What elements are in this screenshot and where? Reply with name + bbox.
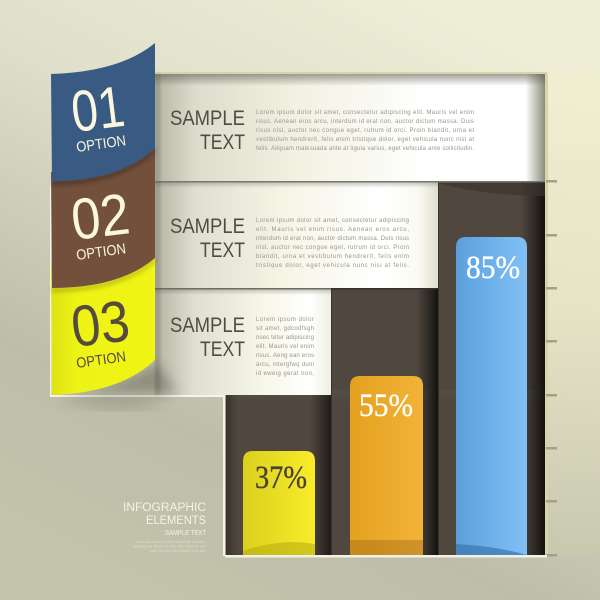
heading 1 <box>170 107 245 154</box>
heading 2: SAMPLE <box>170 215 245 238</box>
heading 3: TEXT <box>200 338 245 361</box>
panel: sample text 3 <box>155 289 331 395</box>
body text 3: sit amet, gdcodfsgh <box>256 326 314 332</box>
body text 2: blandit, urna et vestibulum hendrerit, felis enim <box>256 254 409 260</box>
body text 3 <box>256 317 314 377</box>
ribbon: 01 option <box>51 43 155 181</box>
body text 1: felis. Aliquam malesuada ante at ligula varius, eget vehicula ante sollicitudin. <box>256 146 474 152</box>
bar: 37% yellow <box>243 451 315 555</box>
frame highlight lines <box>50 72 547 558</box>
body text 2 <box>256 218 409 269</box>
infographic title block: adipiscing elit. Mauris vel enim risus. Aeng ean eros <box>133 544 206 548</box>
infographic title block: arcu, intergfwq dum id eweig gerat non. <box>150 549 206 553</box>
body text 3: nsec tetur adipiscing <box>256 335 314 341</box>
heading 3 <box>170 314 245 361</box>
body text 1: risus. Aenean eros arcu, interdum id erat non, auctor dictum massa. Duis <box>256 119 474 125</box>
infographic title block: Lorem ipsum dolor sit amet, gdcodfsgh nsec tetur <box>136 540 207 544</box>
body text 1: Lorem ipsum dolor sit amet, consectetur adipiscing elit. Mauris vel enim <box>256 110 474 116</box>
bar: 85% blue <box>456 237 527 555</box>
number 02: 02 <box>68 181 133 253</box>
infographic title block: SAMPLE TEXT <box>165 530 207 537</box>
infographic title block: INFOGRAPHIC <box>123 500 206 514</box>
label 55%: 55% <box>359 388 413 424</box>
body text 2: elit. Mauris vel enim risus. Aenean eros arcu, <box>256 227 409 233</box>
body text 2: Lorem ipsum dolor sit amet, consectetur adipiscing <box>256 218 409 224</box>
heading 2 <box>170 215 245 262</box>
heading 1: SAMPLE <box>170 107 245 130</box>
number 01: 01 <box>68 74 128 145</box>
heading 3: SAMPLE <box>170 314 245 337</box>
ribbon: 02 option <box>51 140 155 288</box>
body text 3: arcu, intergfwq dum <box>256 362 314 368</box>
body text 2: tristique dolor, eget vehicula nunc nisi at felis. <box>256 263 409 269</box>
panel: sample text 2 <box>155 182 438 290</box>
body text 2: nisl, auctor nec congue eget, rutrum id orci. Proin <box>256 245 409 251</box>
label 85%: 85% <box>466 250 520 286</box>
body text 1: vestibulum hendrerit, felis enim tristique dolor, eget vehicula nunc nisi at <box>256 137 474 143</box>
option label 3: OPTION <box>75 349 127 372</box>
body text 3: Lorem ipsum dolor <box>256 317 314 323</box>
body text 3: id eweig gerat non, <box>256 371 314 377</box>
label 37%: 37% <box>255 460 307 496</box>
body text 2: interdum id erat non, auctor dictum massa. Duis risus <box>256 236 409 242</box>
body text 3: elit. Mauris vel enim <box>256 344 314 350</box>
heading 2: TEXT <box>200 239 245 262</box>
option label 2: OPTION <box>75 241 127 264</box>
option label 1: OPTION <box>75 133 127 156</box>
ribbon shadows <box>60 74 178 409</box>
bar: 55% orange <box>350 376 423 555</box>
number 03: 03 <box>68 288 133 360</box>
body text 1: risus nisl, auctor nec congue eget, rutrum id orci. Proin blandit, urna et <box>256 128 474 134</box>
ribbon: 03 option <box>51 236 155 395</box>
infographic title block <box>123 500 207 553</box>
body text 3: risus. Aeng ean eros <box>256 353 314 359</box>
right scale strip <box>545 73 600 556</box>
infographic title block: ELEMENTS <box>146 513 206 527</box>
dark chart panel <box>225 181 545 555</box>
panel: sample text 1 <box>155 74 545 182</box>
body text 1 <box>256 110 474 152</box>
heading 1: TEXT <box>200 131 245 154</box>
